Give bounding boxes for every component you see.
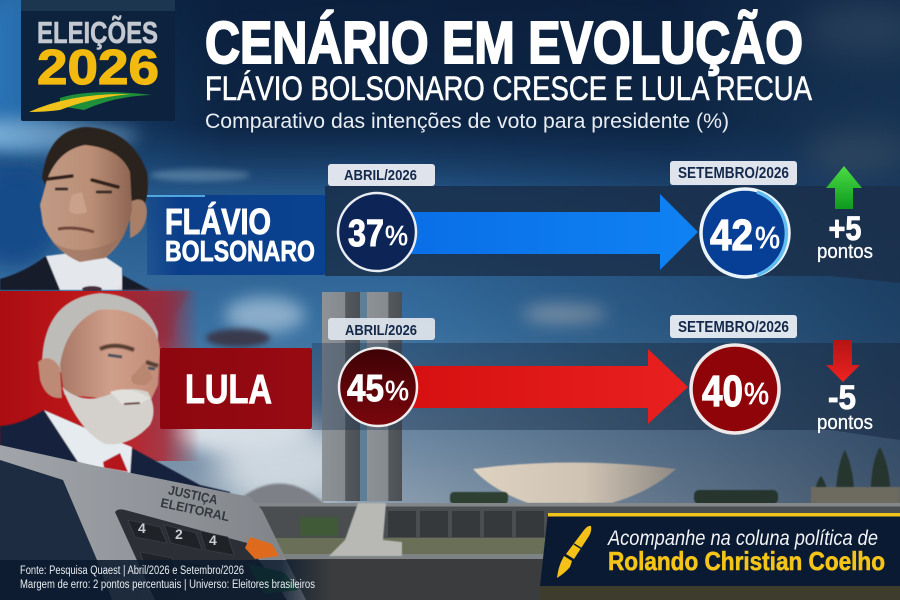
- header: election logo: [21, 0, 175, 121]
- portrait: Flávio: [0, 127, 150, 292]
- value: 42%: [701, 189, 789, 277]
- header: election logo: ELEIÇÕES: [37, 14, 158, 50]
- change: +5 points: +5: [828, 210, 862, 248]
- panel: Flávio Bolsonaro: [0, 127, 900, 292]
- keypad: [115, 509, 287, 600]
- screen: [0, 460, 112, 600]
- trees on the horizon: [450, 447, 890, 504]
- value: 45%: 45: [347, 368, 384, 410]
- icon: red down arrow: [826, 340, 860, 382]
- date: September: [670, 161, 797, 185]
- name label: LULA: [185, 366, 272, 412]
- value: 40%: 40: [702, 367, 743, 416]
- icon: flag swoosh: [29, 92, 152, 112]
- date: September: SETEMBRO/2026: [678, 165, 789, 182]
- name label: [147, 195, 325, 275]
- keypad: 2: [175, 526, 183, 542]
- change: +5 points: [817, 210, 873, 263]
- data band: [325, 186, 900, 283]
- description: Comparativo das intenções de voto para presidente (%): [205, 110, 729, 133]
- keypad: 4: [138, 520, 146, 536]
- date: September: SETEMBRO/2026: [678, 319, 789, 336]
- ramp: [329, 503, 402, 556]
- label: Justiça Eleitoral: JUSTIÇA: [167, 482, 220, 508]
- data band: [312, 343, 900, 440]
- value: 45%: [339, 348, 417, 426]
- name label: FLÁVIO: [165, 201, 271, 242]
- label: Justiça Eleitoral: [159, 481, 234, 524]
- change: -5 points: [817, 379, 873, 434]
- value: 45%: %: [385, 375, 409, 406]
- twin towers: [322, 292, 402, 501]
- change: -5 points: -5: [828, 379, 856, 417]
- panel: Lula: [0, 291, 900, 520]
- date: April: [328, 164, 435, 186]
- source note: [0, 560, 330, 600]
- name label: [160, 348, 312, 429]
- name label: BOLSONARO: [165, 236, 315, 268]
- date: September: [670, 315, 797, 338]
- value: 42%: %: [755, 220, 780, 255]
- value: 37%: [338, 193, 416, 271]
- source note: Margem de erro: 2 pontos percentuais | Universo: Eleitores brasileiros: [20, 579, 315, 591]
- header: election logo: 2026: [37, 41, 159, 95]
- icon: fountain pen: [557, 526, 591, 578]
- date: April: ABRIL/2026: [344, 167, 417, 184]
- change: +5 points: pontos: [817, 241, 873, 263]
- value: 40%: %: [744, 376, 769, 411]
- portrait: Lula: [0, 293, 230, 520]
- dome: [232, 484, 326, 505]
- icon: green up arrow: [826, 166, 862, 209]
- voting machine: [0, 445, 306, 600]
- label: Justiça Eleitoral: ELEITORAL: [159, 495, 231, 524]
- background: National Congress, Brasilia: [232, 292, 900, 600]
- value: 37%: 37: [348, 213, 384, 255]
- main building: [232, 503, 900, 540]
- date: April: ABRIL/2026: [345, 322, 417, 339]
- date: April: [328, 318, 435, 340]
- value: 40%: [691, 345, 779, 433]
- arrow: blue rising: [410, 194, 698, 270]
- value: 42%: 42: [710, 211, 753, 260]
- bowl: [473, 462, 676, 503]
- confirm and correct buttons: [245, 537, 279, 559]
- red portrait backdrop: [0, 291, 200, 461]
- keypad: 4: [209, 532, 217, 548]
- arrow: red falling: [410, 349, 688, 424]
- ground and water: [232, 538, 900, 554]
- callout: column credit: [540, 513, 900, 586]
- change: -5 points: pontos: [817, 412, 873, 434]
- value: 37%: %: [385, 220, 408, 251]
- source note: Fonte: Pesquisa Quaest | Abril/2026 e Setembro/2026: [20, 565, 244, 577]
